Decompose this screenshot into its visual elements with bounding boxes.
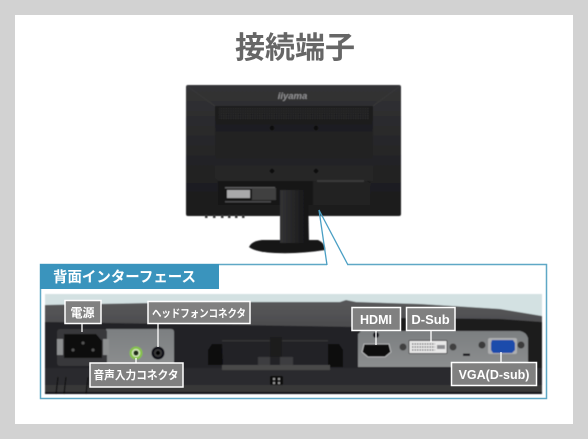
vent ribs	[56, 377, 88, 394]
label: audio input connector	[90, 363, 183, 387]
panel heading: 背面インターフェース	[53, 268, 196, 286]
bevel highlights	[187, 86, 400, 106]
leader lines	[82, 323, 501, 363]
label: HDMI: HDMI	[360, 313, 392, 327]
right metal plate	[358, 331, 528, 367]
bottom strip	[45, 368, 542, 394]
photo base	[45, 294, 542, 394]
rating label	[225, 187, 276, 202]
lower recess	[218, 181, 370, 205]
DVI port	[400, 340, 456, 354]
screw	[270, 376, 283, 385]
photo: connector closeup	[45, 294, 542, 394]
label: D-Sub: D-Sub	[411, 312, 450, 327]
sky band	[45, 294, 542, 394]
title: 接続端子	[235, 32, 355, 65]
monitor body	[186, 85, 401, 216]
HDMI port	[362, 332, 391, 357]
monitor rear view	[186, 85, 401, 253]
label: power: 電源	[70, 305, 95, 320]
mounting screws	[270, 126, 318, 173]
audio input jack	[130, 346, 142, 360]
label: audio input connector: 音声入力コネクタ	[94, 368, 178, 382]
dark band	[45, 322, 358, 368]
left metal plate	[106, 329, 174, 366]
label: power	[65, 300, 101, 324]
callout pointer lines	[319, 210, 348, 265]
label: D-Sub	[406, 308, 455, 330]
recessed back panel	[215, 106, 373, 181]
VGA port	[478, 338, 524, 354]
panel heading	[40, 264, 219, 289]
brand logo: iiyama	[278, 91, 307, 102]
power inlet	[57, 329, 109, 366]
stand base	[249, 240, 325, 253]
stand neck	[280, 190, 309, 243]
panel: rear interface frame	[40, 264, 546, 398]
label: VGA: VGA(D-sub)	[459, 368, 529, 382]
label: VGA	[452, 362, 536, 386]
stand bracket	[208, 337, 343, 370]
ventilation grille	[219, 108, 369, 120]
label: headphone connector: ヘッドフォンコネクタ	[152, 307, 246, 320]
chassis lip	[45, 300, 542, 394]
status LED slot	[463, 354, 470, 356]
connector cover	[313, 181, 370, 205]
bottom buttons	[205, 215, 244, 218]
label: headphone connector	[148, 302, 250, 324]
label: HDMI	[352, 308, 400, 330]
headphone jack	[152, 346, 164, 360]
